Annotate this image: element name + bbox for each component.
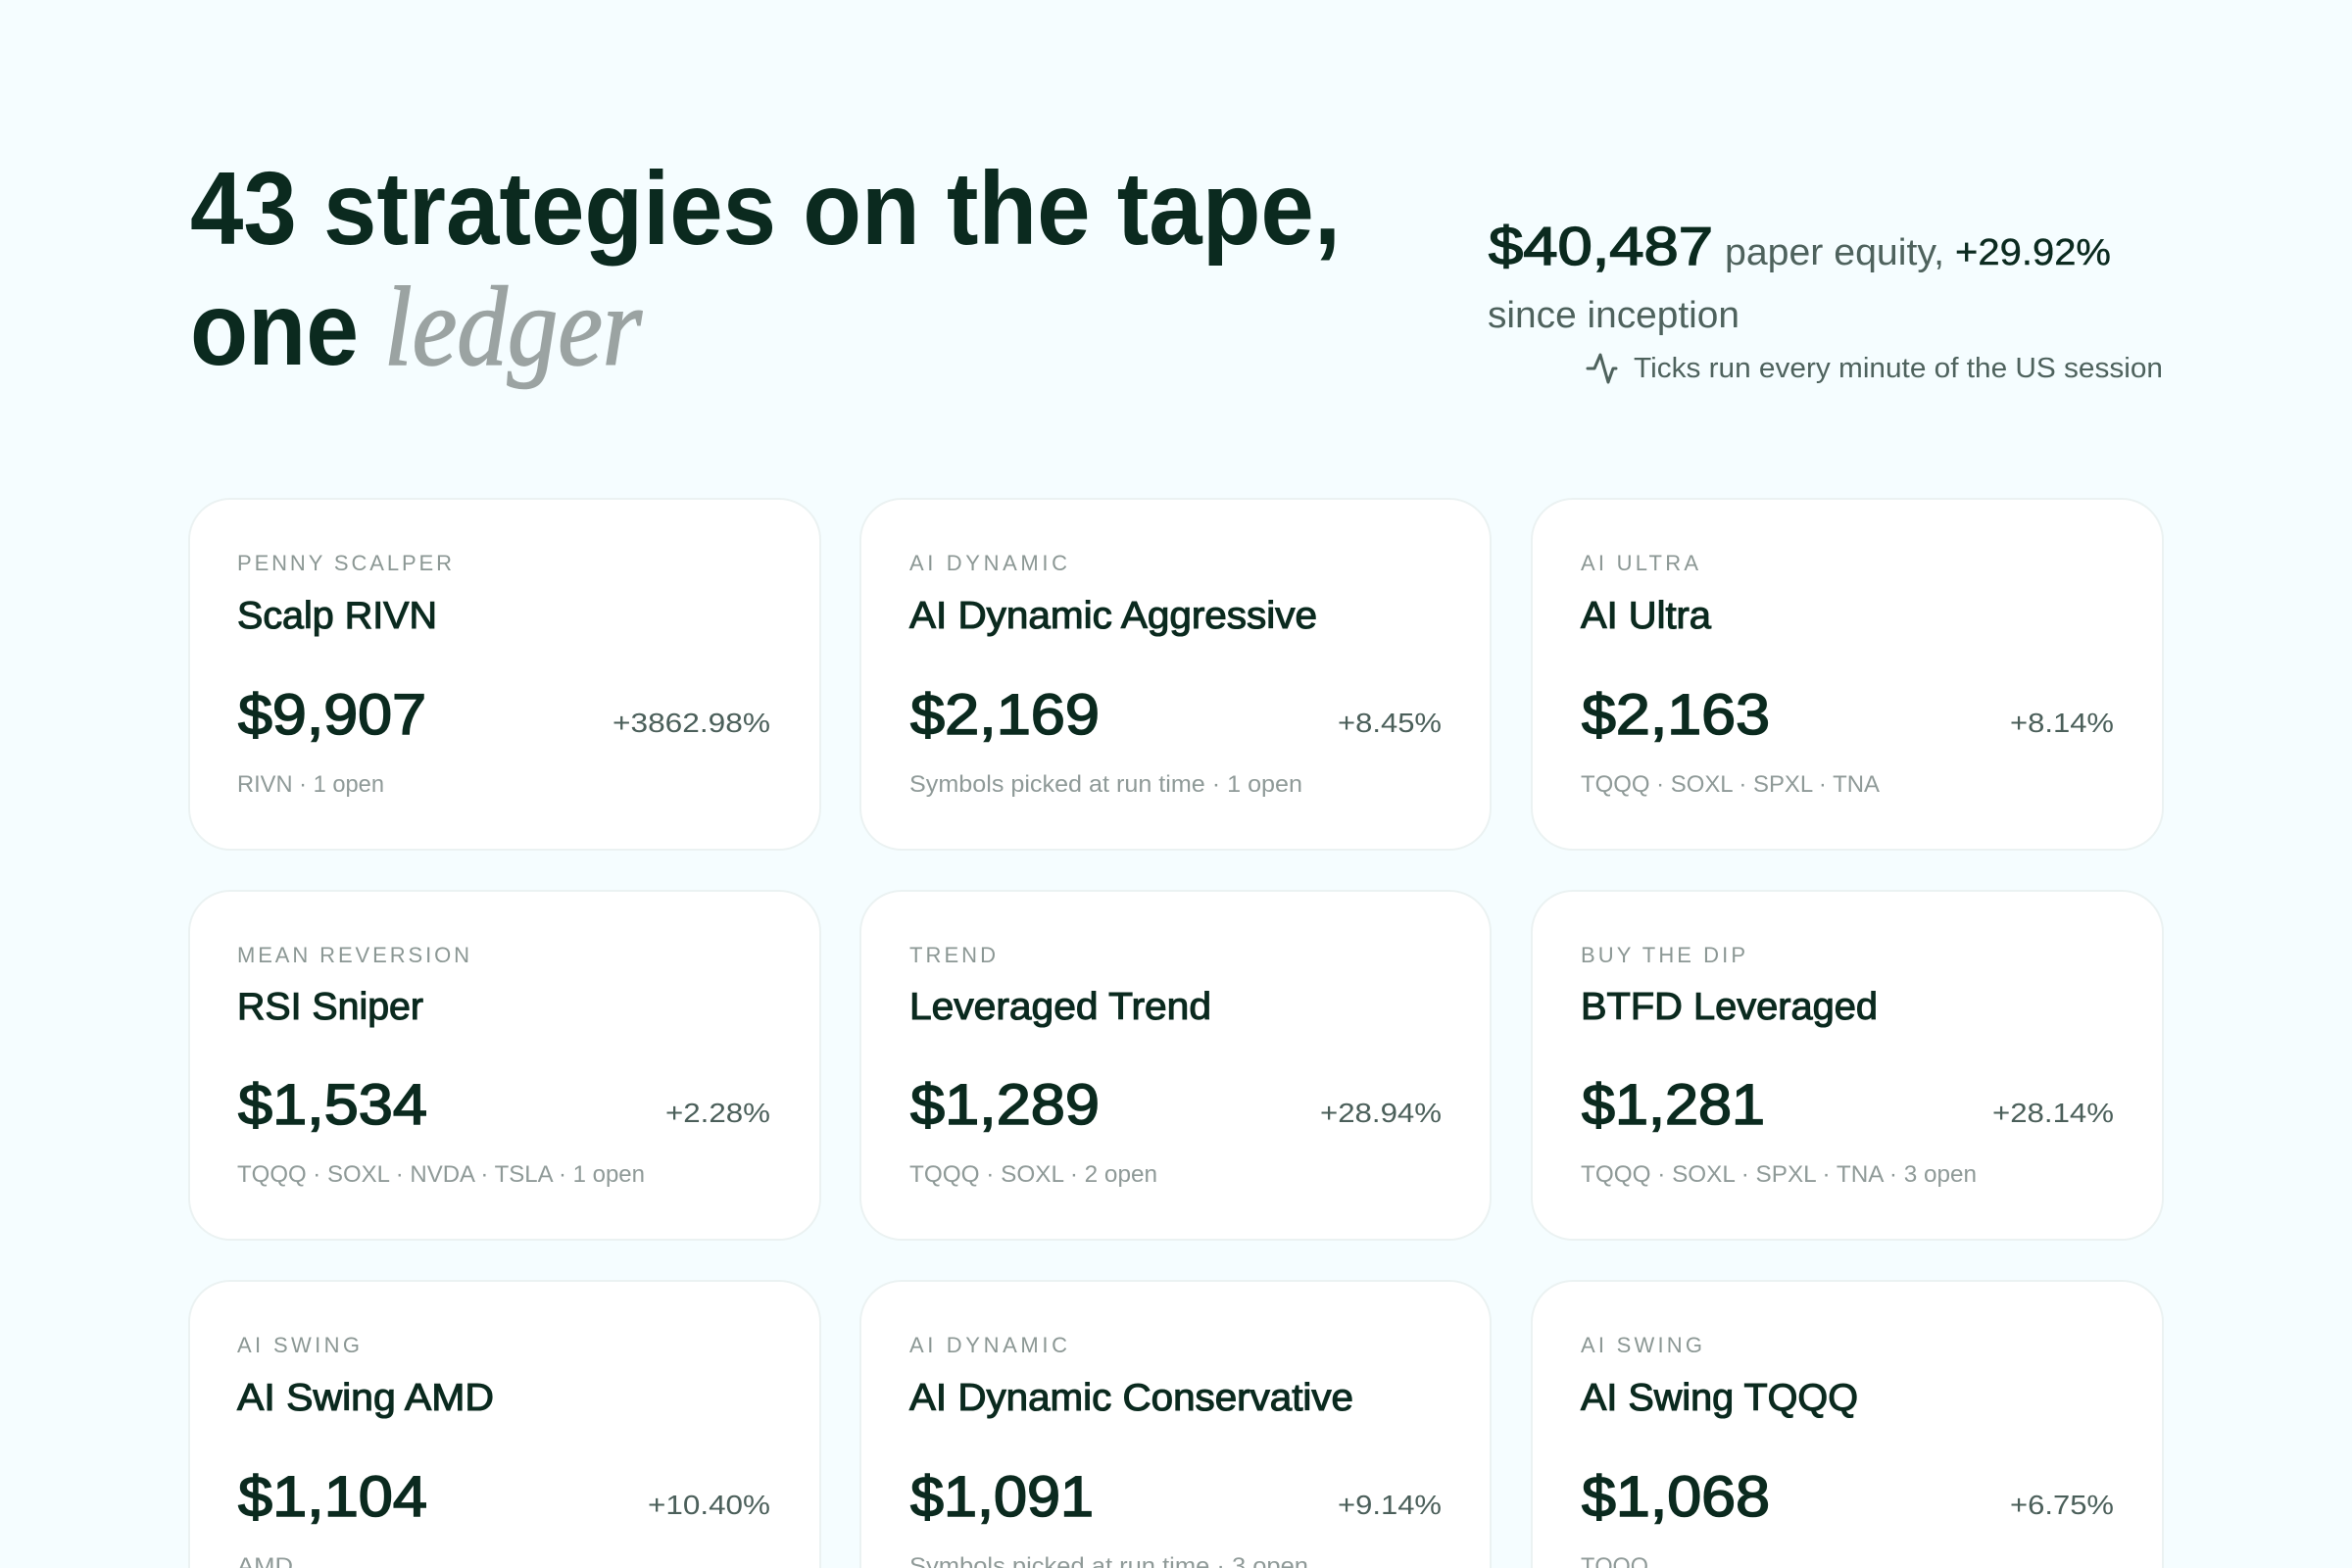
card: RSI Sniper: TQQQ · SOXL · NVDA · TSLA · 1 open bbox=[237, 1161, 645, 1188]
card: AI Dynamic Conservative: $1,091 bbox=[910, 1465, 1094, 1529]
summary: paper equity bbox=[1488, 216, 2111, 336]
card: AI Swing AMD: AI Swing AMD bbox=[237, 1377, 494, 1419]
card: AI Ultra: +8.14% bbox=[2010, 708, 2114, 738]
card: AI Swing TQQQ: +6.75% bbox=[2010, 1490, 2114, 1520]
card: AI Dynamic Conservative: +9.14% bbox=[1338, 1490, 1442, 1520]
icon: activity pulse bbox=[1588, 355, 1616, 382]
card: Leveraged Trend: $1,289 bbox=[910, 1073, 1100, 1137]
title: 43 strategies on the tape, bbox=[190, 151, 1341, 267]
card: RSI Sniper: RSI Sniper bbox=[237, 986, 423, 1028]
card: AI Ultra: TQQQ · SOXL · SPXL · TNA bbox=[1581, 771, 1880, 798]
card: AI Swing AMD bbox=[189, 1281, 820, 1568]
card: AI Ultra: $2,163 bbox=[1582, 683, 1770, 747]
card: Scalp RIVN: $9,907 bbox=[238, 683, 426, 747]
card: AI Dynamic Aggressive: AI Dynamic Aggressive bbox=[909, 595, 1317, 637]
card: AI Ultra bbox=[1532, 499, 2163, 850]
card: BTFD Leveraged: +28.14% bbox=[1992, 1098, 2114, 1128]
card: AI Dynamic Conservative: AI Dynamic Conservative bbox=[909, 1377, 1353, 1419]
card: AI Swing AMD: $1,104 bbox=[238, 1465, 427, 1529]
card: AI Dynamic Aggressive: +8.45% bbox=[1338, 708, 1442, 738]
card: AI Swing TQQQ: AI Swing TQQQ bbox=[1581, 1377, 1858, 1419]
card: Scalp RIVN: +3862.98% bbox=[612, 708, 770, 738]
card: Scalp RIVN: RIVN · 1 open bbox=[237, 771, 384, 798]
note: tick schedule: Ticks run every minute of the US session bbox=[1634, 353, 2163, 384]
card: RSI Sniper bbox=[189, 891, 820, 1240]
card: AI Dynamic Aggressive: $2,169 bbox=[910, 683, 1100, 747]
card: Leveraged Trend: Leveraged Trend bbox=[909, 986, 1211, 1028]
card: AI Dynamic Aggressive: AI DYNAMIC bbox=[909, 551, 1067, 575]
card: RSI Sniper: +2.28% bbox=[665, 1098, 770, 1128]
summary: paper equity: $40,487 bbox=[1489, 216, 1713, 276]
card: AI Dynamic Aggressive bbox=[860, 499, 1491, 850]
card: RSI Sniper: $1,534 bbox=[238, 1073, 427, 1137]
card: BTFD Leveraged bbox=[1532, 891, 2163, 1240]
card: BTFD Leveraged: BTFD Leveraged bbox=[1581, 986, 1878, 1028]
summary: paper equity: paper equity, bbox=[1725, 232, 1944, 273]
title: ledger bbox=[384, 265, 643, 389]
card: AI Ultra: AI ULTRA bbox=[1581, 551, 1698, 575]
title: one bbox=[190, 271, 359, 387]
card: AI Swing AMD: +10.40% bbox=[648, 1490, 770, 1520]
card: AI Dynamic Aggressive: Symbols picked at run time · 1 open bbox=[909, 771, 1302, 798]
card: Leveraged Trend: TQQQ · SOXL · 2 open bbox=[909, 1161, 1157, 1188]
card: Leveraged Trend bbox=[860, 891, 1491, 1240]
summary: paper equity: since inception bbox=[1488, 295, 1740, 336]
card: AI Swing TQQQ: AI SWING bbox=[1581, 1333, 1702, 1357]
card: BTFD Leveraged: $1,281 bbox=[1582, 1073, 1765, 1137]
card: AI Swing TQQQ: $1,068 bbox=[1582, 1465, 1770, 1529]
title bbox=[190, 151, 1341, 389]
card: AI Swing AMD: AI SWING bbox=[237, 1333, 360, 1357]
card: Leveraged Trend: TREND bbox=[909, 943, 996, 967]
card: BTFD Leveraged: TQQQ · SOXL · SPXL · TNA · 3 open bbox=[1581, 1161, 1977, 1188]
card: AI Dynamic Conservative: AI DYNAMIC bbox=[909, 1333, 1067, 1357]
card: Scalp RIVN: Scalp RIVN bbox=[237, 595, 437, 637]
card: Leveraged Trend: +28.94% bbox=[1320, 1098, 1442, 1128]
card: RSI Sniper: MEAN REVERSION bbox=[237, 943, 469, 967]
card: AI Swing TQQQ bbox=[1532, 1281, 2163, 1568]
card: Scalp RIVN: PENNY SCALPER bbox=[237, 551, 452, 575]
card: AI Ultra: AI Ultra bbox=[1581, 595, 1711, 637]
card: AI Dynamic Conservative bbox=[860, 1281, 1491, 1568]
summary: paper equity: +29.92% bbox=[1955, 232, 2111, 273]
card: BTFD Leveraged: BUY THE DIP bbox=[1581, 943, 1745, 967]
card: Scalp RIVN bbox=[189, 499, 820, 850]
